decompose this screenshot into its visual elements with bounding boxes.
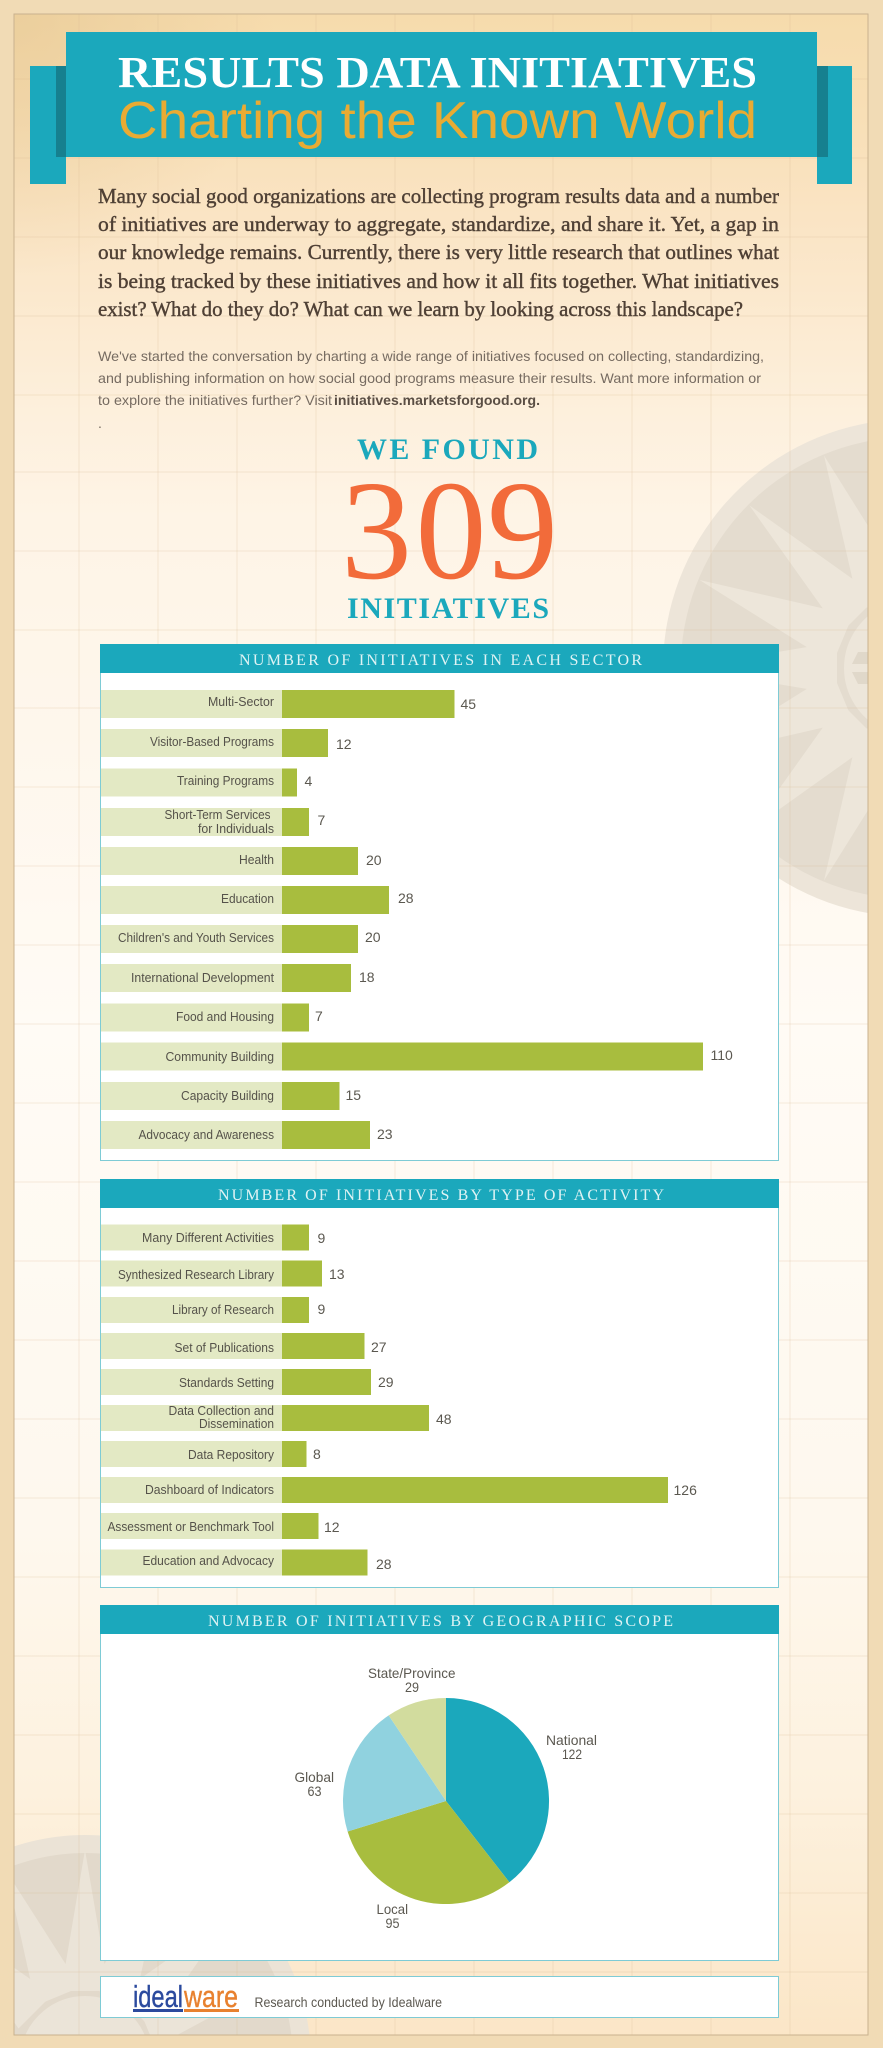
bar chart: activity: Standards Setting [179, 1375, 274, 1390]
bar chart: sector: 15 [346, 1087, 361, 1103]
intro paragraph: Many social good organizations are collecting program results data and a number [98, 184, 779, 208]
bar chart: sector: 18 [359, 969, 375, 985]
bar chart: sector: 7 [318, 812, 326, 828]
bar chart: activity: Synthesized Research Library [118, 1267, 274, 1282]
panel: initiatives by sector [100, 644, 779, 1160]
bar chart: sector: Community Building [166, 1049, 274, 1064]
bar chart: activity: Library of Research [172, 1302, 274, 1317]
compass rose: right [663, 421, 883, 915]
bar chart: sector: Advocacy and Awareness [138, 1127, 274, 1142]
bar chart: sector: 20 [365, 929, 381, 945]
heading: activity [100, 1179, 779, 1208]
pie chart: State/Province [368, 1665, 456, 1681]
secondary paragraph: to explore the initiatives further? Visit [98, 392, 332, 408]
secondary paragraph: We've started the conversation by charting a wide range of initiatives focused on collecting, standardizing, [98, 348, 764, 364]
heading: activity: NUMBER OF INITIATIVES BY TYPE OF ACTIVITY [218, 1187, 664, 1204]
bar chart: sector: Multi-Sector [208, 694, 275, 709]
intro paragraph [98, 184, 779, 321]
intro paragraph: exist? What do they do? What can we learn by looking across this landscape? [98, 297, 743, 321]
bar chart: sector: Health [239, 852, 274, 867]
panel: initiatives by activity [100, 1179, 779, 1588]
credit text: Research conducted by Idealware [254, 1995, 442, 2010]
title banner [30, 32, 852, 184]
heading: geographic scope [100, 1605, 779, 1634]
bar chart: sector: 110 [710, 1047, 733, 1063]
bar chart: sector: Visitor-Based Programs [150, 734, 274, 749]
bar chart: activity: 8 [313, 1446, 321, 1462]
logo: idealware: ideal [133, 1979, 183, 2014]
heading: geographic scope: NUMBER OF INITIATIVES BY GEOGRAPHIC SCOPE [208, 1613, 673, 1630]
bar chart: activity: 9 [318, 1230, 326, 1246]
heading: sector [100, 644, 779, 673]
bar chart: sector: 23 [377, 1126, 393, 1142]
intro paragraph: is being tracked by these initiatives and how it all fits together. What initiatives [98, 269, 779, 293]
heading: sector: NUMBER OF INITIATIVES IN EACH SECTOR [239, 652, 642, 669]
big number 309: 309 [341, 451, 558, 609]
bar chart: sector: 4 [304, 773, 312, 789]
intro paragraph: of initiatives are underway to aggregate, standardize, and share it. Yet, a gap in [98, 212, 779, 236]
bar chart: sector [101, 690, 733, 1149]
footer credit panel [100, 1976, 778, 2018]
pie chart: 29 [405, 1679, 419, 1695]
bar chart: sector: Short-Term Services [164, 807, 271, 822]
bar chart: activity: 28 [376, 1556, 392, 1572]
bar chart: activity: 12 [324, 1519, 340, 1535]
bar chart: sector: 12 [336, 736, 352, 752]
bar chart: activity: 126 [674, 1482, 697, 1498]
secondary paragraph: and publishing information on how social good programs measure their results. Want more information or [98, 370, 761, 386]
bar chart: activity: 13 [329, 1266, 345, 1282]
bar chart: sector: Training Programs [177, 773, 274, 788]
secondary paragraph: . [98, 415, 102, 431]
pie chart: 95 [386, 1915, 400, 1931]
pie chart: 63 [308, 1783, 322, 1799]
bar chart: activity: Many Different Activities [142, 1230, 274, 1245]
headline statistic: WE FOUND [357, 433, 538, 466]
bar chart: activity: Dashboard of Indicators [145, 1482, 274, 1497]
bar chart: activity: 48 [436, 1411, 452, 1427]
bar chart: sector: Education [221, 891, 274, 906]
bar chart: activity: Assessment or Benchmark Tool [108, 1519, 274, 1534]
pie chart: 122 [562, 1746, 582, 1762]
pie chart: Local [376, 1901, 408, 1917]
headline statistic [341, 433, 558, 625]
bar chart: sector: Food and Housing [176, 1009, 274, 1024]
logo: idealware [133, 1979, 239, 2014]
title line 1: RESULTS DATA INITIATIVES [118, 48, 757, 97]
pie chart: National [546, 1732, 597, 1748]
bar chart: activity: Data Repository [188, 1447, 274, 1462]
bar chart: sector: 7 [315, 1008, 323, 1024]
compass rose: bottom left [0, 1835, 311, 2048]
bar chart: activity: 29 [378, 1374, 394, 1390]
bar chart: activity: Data Collection and [168, 1403, 274, 1418]
logo: idealware: ware [183, 1979, 238, 2014]
title line 2: Charting the Known World [118, 92, 757, 150]
bar chart: activity: Set of Publications [174, 1340, 274, 1355]
secondary paragraph: initiatives.marketsforgood.org. [334, 392, 540, 408]
bar chart: sector: 20 [366, 852, 382, 868]
bar chart: activity: 9 [318, 1301, 326, 1317]
pie chart [294, 1665, 597, 1931]
bar chart: activity: Dissemination [199, 1416, 274, 1431]
secondary paragraph [98, 348, 764, 431]
bar chart: activity [101, 1224, 697, 1576]
bar chart: sector: for Individuals [198, 821, 274, 836]
bar chart: activity: 27 [371, 1339, 387, 1355]
bar chart: sector: 45 [460, 696, 476, 712]
headline statistic: INITIATIVES [347, 592, 549, 625]
bar chart: sector: Children's and Youth Services [118, 930, 274, 945]
pie chart: Global [294, 1769, 334, 1785]
bar chart: sector: International Development [131, 970, 274, 985]
intro paragraph: our knowledge remains. Currently, there is very little research that outlines what [98, 240, 779, 264]
bar chart: sector: Capacity Building [181, 1088, 274, 1103]
bar chart: activity: Education and Advocacy [142, 1553, 274, 1568]
panel: initiatives by geographic scope [100, 1605, 779, 1960]
bar chart: sector: 28 [398, 890, 414, 906]
